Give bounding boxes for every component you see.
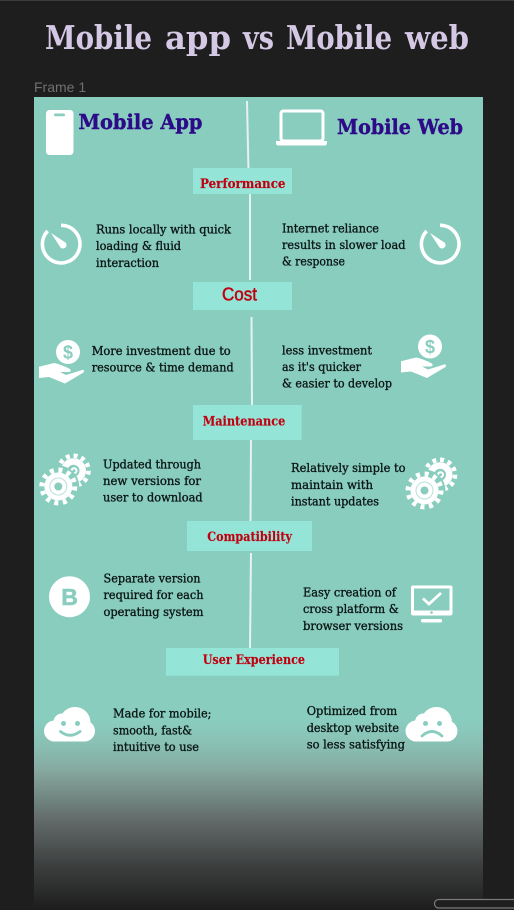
icon: money hand right: [401, 334, 446, 378]
centre timeline: [247, 101, 252, 648]
icon: timer right: [421, 225, 459, 263]
text: mobile app user experience: Made for mobile;: [113, 706, 212, 720]
text: mobile app compatibility: operating system: [104, 605, 204, 619]
text: mobile web user experience: [307, 704, 405, 752]
text: mobile app cost: [92, 344, 234, 374]
title: app: [165, 18, 231, 57]
title: vs: [242, 18, 274, 57]
title: Mobile: [45, 18, 152, 57]
section: performance label: [193, 168, 292, 194]
text: mobile web user experience: so less satisfying: [307, 738, 405, 752]
text: mobile app user experience: intuitive to use: [113, 740, 199, 754]
text: mobile app compatibility: required for each: [104, 588, 204, 602]
section: compatibility label: [187, 521, 312, 551]
icon: timer left: [42, 225, 80, 263]
section: cost label: [193, 282, 292, 310]
text: mobile app cost: resource & time demand: [92, 360, 234, 374]
text: mobile web compatibility: Easy creation of: [303, 586, 397, 600]
text: mobile app performance: interaction: [96, 256, 159, 270]
text: mobile app maintenance: new versions for: [103, 474, 201, 488]
heading: Mobile App: Mobile App: [78, 110, 202, 134]
icon: gears right: [404, 460, 455, 512]
text: mobile web cost: as it's quicker: [282, 360, 361, 374]
text: mobile app user experience: [113, 706, 212, 754]
section: performance label: Performance: [200, 177, 286, 192]
text: mobile app compatibility: [104, 572, 204, 619]
section: user experience label: User Experience: [203, 653, 305, 668]
text: mobile web maintenance: [291, 461, 406, 508]
text: mobile web user experience: desktop website: [307, 721, 399, 735]
text: mobile web cost: less investment: [282, 344, 372, 358]
text: mobile app performance: Runs locally with quick: [96, 222, 232, 236]
text: mobile web compatibility: cross platform &: [303, 602, 399, 616]
text: mobile app compatibility: Separate version: [104, 572, 201, 586]
icon: phone: [46, 110, 74, 155]
text: mobile web cost: & easier to develop: [282, 376, 392, 390]
heading: Mobile Web: Mobile Web: [337, 115, 463, 139]
icon: money hand right: $: [425, 337, 435, 357]
section: user experience label: [166, 648, 339, 676]
icon: laptop: [276, 111, 327, 146]
text: mobile web performance: results in slower load: [282, 238, 406, 252]
icon: gears left: [37, 456, 88, 508]
text: mobile web performance: Internet reliance: [282, 222, 379, 236]
text: mobile app performance: [96, 222, 232, 270]
section: maintenance label: Maintenance: [203, 415, 285, 430]
icon: B badge: [49, 576, 90, 617]
text: mobile web maintenance: instant updates: [291, 494, 379, 508]
section: compatibility label: Compatibility: [207, 530, 292, 545]
text: mobile app maintenance: Updated through: [103, 458, 201, 472]
text: mobile app performance: loading & fluid: [96, 239, 181, 253]
panel: comparison frame: [34, 97, 483, 907]
section: cost label: Cost: [222, 284, 257, 304]
text: mobile web compatibility: browser versions: [303, 619, 403, 633]
text: mobile web maintenance: maintain with: [291, 478, 373, 492]
text: mobile web cost: [282, 344, 392, 390]
text: mobile web compatibility: [303, 586, 403, 633]
text: mobile web performance: & response: [282, 254, 345, 268]
text: mobile app maintenance: [103, 458, 203, 504]
icon: B badge: B: [61, 584, 78, 610]
icon: happy cloud: [44, 707, 95, 742]
title: web: [404, 18, 469, 57]
section: maintenance label: [193, 405, 302, 440]
text: mobile web performance: [282, 222, 406, 268]
scrollbar: [434, 900, 514, 908]
icon: money hand left: $: [63, 342, 73, 362]
icon: sad cloud: [406, 707, 458, 742]
title: [45, 18, 469, 57]
icon: monitor with check: [411, 586, 452, 622]
text: mobile web maintenance: Relatively simple to: [291, 461, 406, 475]
text: mobile app user experience: smooth, fast&: [113, 724, 192, 738]
text: mobile web user experience: Optimized from: [307, 704, 398, 718]
text: mobile app cost: More investment due to: [92, 344, 231, 358]
frame label: Frame 1: [34, 79, 86, 95]
title: Mobile: [286, 18, 392, 57]
icon: money hand left: [39, 340, 84, 384]
text: mobile app maintenance: user to download: [103, 490, 203, 504]
